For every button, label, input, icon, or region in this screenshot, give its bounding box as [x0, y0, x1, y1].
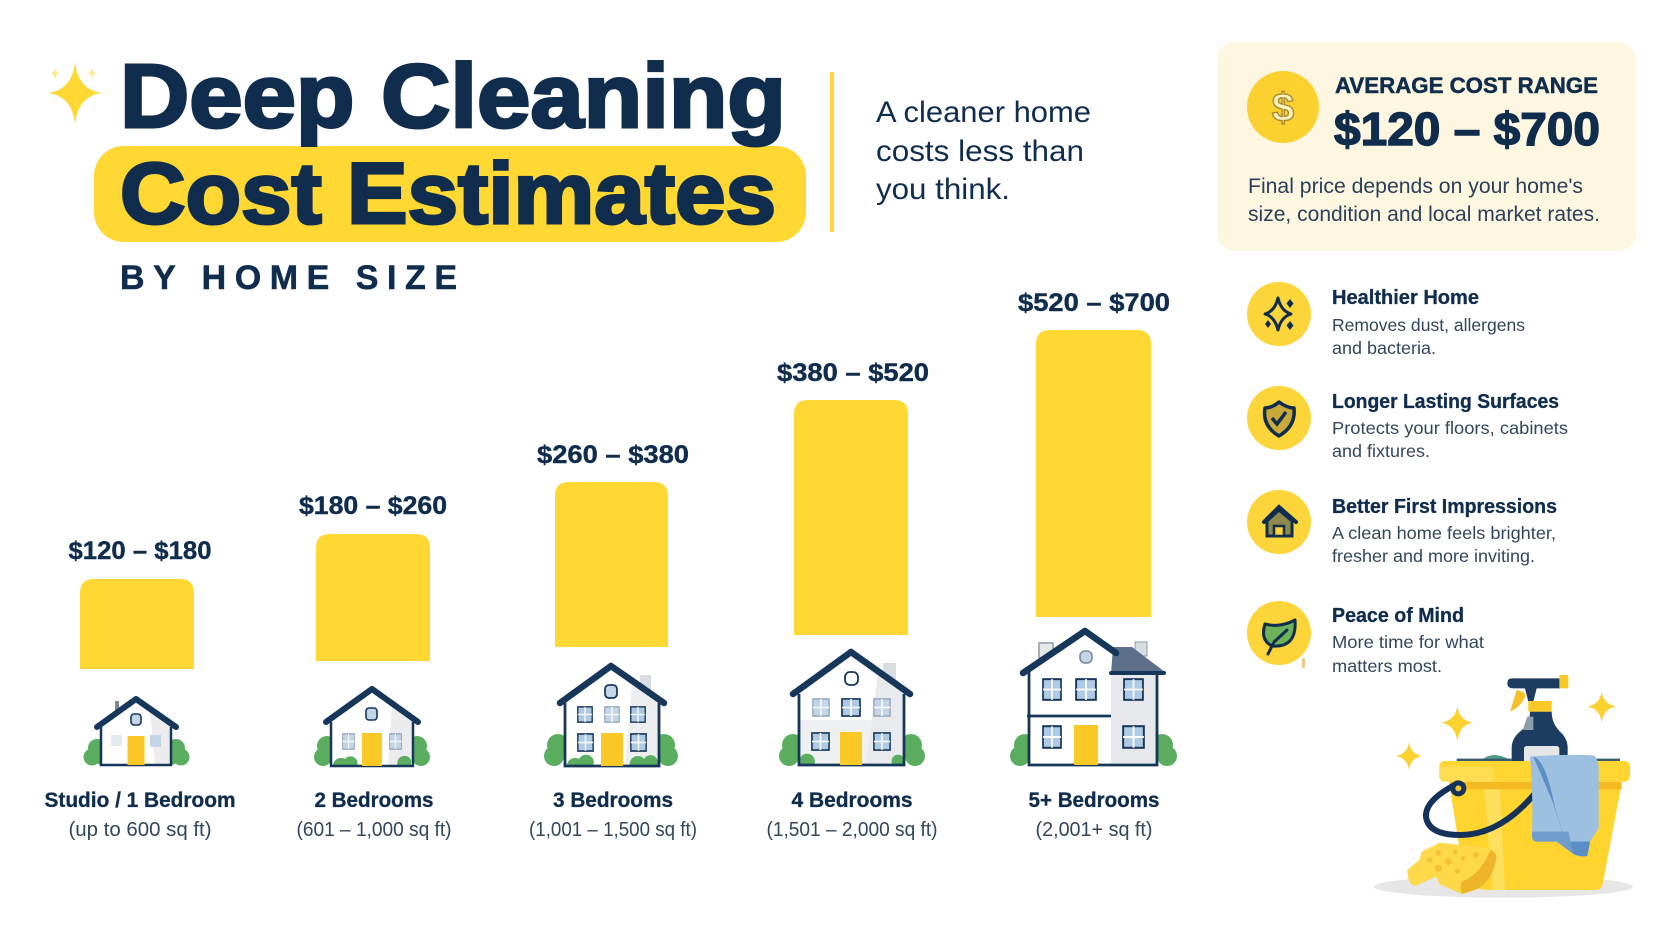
cloth	[1530, 755, 1599, 856]
chart: cost by home size	[44, 289, 1177, 841]
sponge	[1407, 843, 1497, 894]
column: 5+ bedrooms: $520 – $700	[1018, 289, 1170, 317]
icon: 5+ bedroom house	[1010, 631, 1177, 766]
benefit: better first impressions: fresher and more inviting.	[1332, 546, 1535, 566]
benefit: better first impressions	[1247, 490, 1557, 566]
benefit: peace of mind: matters most.	[1332, 656, 1442, 676]
illustration: cleaning bucket with spray bottle	[1374, 675, 1633, 898]
benefit: better first impressions: Better First Impressions	[1332, 496, 1557, 518]
column: 5+ bedrooms: 5+ Bedrooms	[1028, 789, 1160, 812]
tagline	[876, 96, 1091, 206]
column: 4 bedrooms: 4 Bedrooms	[792, 789, 912, 812]
icon: title sparkle	[48, 62, 102, 124]
column: 5+ bedrooms: (2,001+ sq ft)	[1036, 819, 1152, 841]
title line two: Cost Estimates	[120, 146, 776, 242]
benefit: peace of mind	[1247, 601, 1484, 676]
panel: average cost range	[1217, 42, 1636, 251]
column: 2 bedrooms	[296, 492, 452, 841]
cost range note: Final price depends on your home's	[1248, 175, 1583, 198]
title	[94, 47, 806, 242]
tagline: A cleaner home	[876, 96, 1091, 129]
spray bottle	[1457, 675, 1620, 763]
panel: benefits list	[1247, 282, 1568, 676]
benefit: peace of mind: Peace of Mind	[1332, 605, 1464, 627]
cost range note: size, condition and local market rates.	[1248, 203, 1600, 226]
column: 3 bedrooms: $260 – $380	[537, 441, 689, 469]
column: studio: $120 – $180	[68, 537, 212, 565]
benefit: longer lasting surfaces: and fixtures.	[1332, 441, 1430, 461]
icon: 3 bedroom house	[544, 666, 678, 766]
icon: dollar coin	[1247, 71, 1319, 143]
benefit: healthier home	[1247, 282, 1525, 358]
column: 2 bedrooms: 2 Bedrooms	[314, 789, 434, 812]
icon: 2 bedroom house	[314, 689, 430, 766]
cost range heading: AVERAGE COST RANGE	[1335, 73, 1598, 98]
benefit: healthier home: and bacteria.	[1332, 338, 1436, 358]
cost range note	[1248, 175, 1600, 226]
column: 2 bedrooms: (601 – 1,000 sq ft)	[296, 819, 452, 841]
shadow	[1374, 876, 1633, 898]
sparkles	[1396, 692, 1616, 770]
title highlight pill	[94, 146, 806, 242]
column: 5+ bedrooms	[1010, 289, 1177, 841]
handle	[1426, 780, 1535, 835]
column: 3 bedrooms	[529, 441, 697, 841]
column: 4 bedrooms: $380 – $520	[777, 359, 929, 387]
column: studio: Studio / 1 Bedroom	[44, 789, 236, 812]
icon: dollar coin: $	[1272, 86, 1294, 130]
column: studio	[44, 537, 236, 841]
benefit: longer lasting surfaces: Longer Lasting Surfaces	[1332, 391, 1559, 413]
icon: 4 bedroom house	[779, 652, 925, 766]
subtitle: BY HOME SIZE	[120, 259, 457, 297]
column: 4 bedrooms	[766, 359, 938, 841]
benefit: longer lasting surfaces	[1247, 386, 1568, 461]
tagline: you think.	[876, 173, 1010, 206]
title line one: Deep Cleaning	[120, 47, 786, 147]
column: studio: (up to 600 sq ft)	[68, 819, 212, 841]
cost range value: $120 – $700	[1334, 103, 1600, 155]
column: 2 bedrooms: $180 – $260	[299, 492, 447, 520]
column: 3 bedrooms: 3 Bedrooms	[553, 789, 673, 812]
icon: studio house	[84, 699, 190, 766]
benefit: peace of mind: More time for what	[1332, 632, 1484, 652]
benefit: healthier home: Removes dust, allergens	[1332, 315, 1525, 335]
benefit: longer lasting surfaces: Protects your floors, cabinets	[1332, 418, 1568, 438]
benefit: healthier home: Healthier Home	[1332, 287, 1479, 309]
tagline: costs less than	[876, 135, 1084, 168]
benefit: better first impressions: A clean home feels brighter,	[1332, 523, 1556, 543]
bucket	[1439, 761, 1630, 890]
column: 3 bedrooms: (1,001 – 1,500 sq ft)	[529, 819, 697, 841]
column: 4 bedrooms: (1,501 – 2,000 sq ft)	[766, 819, 938, 841]
